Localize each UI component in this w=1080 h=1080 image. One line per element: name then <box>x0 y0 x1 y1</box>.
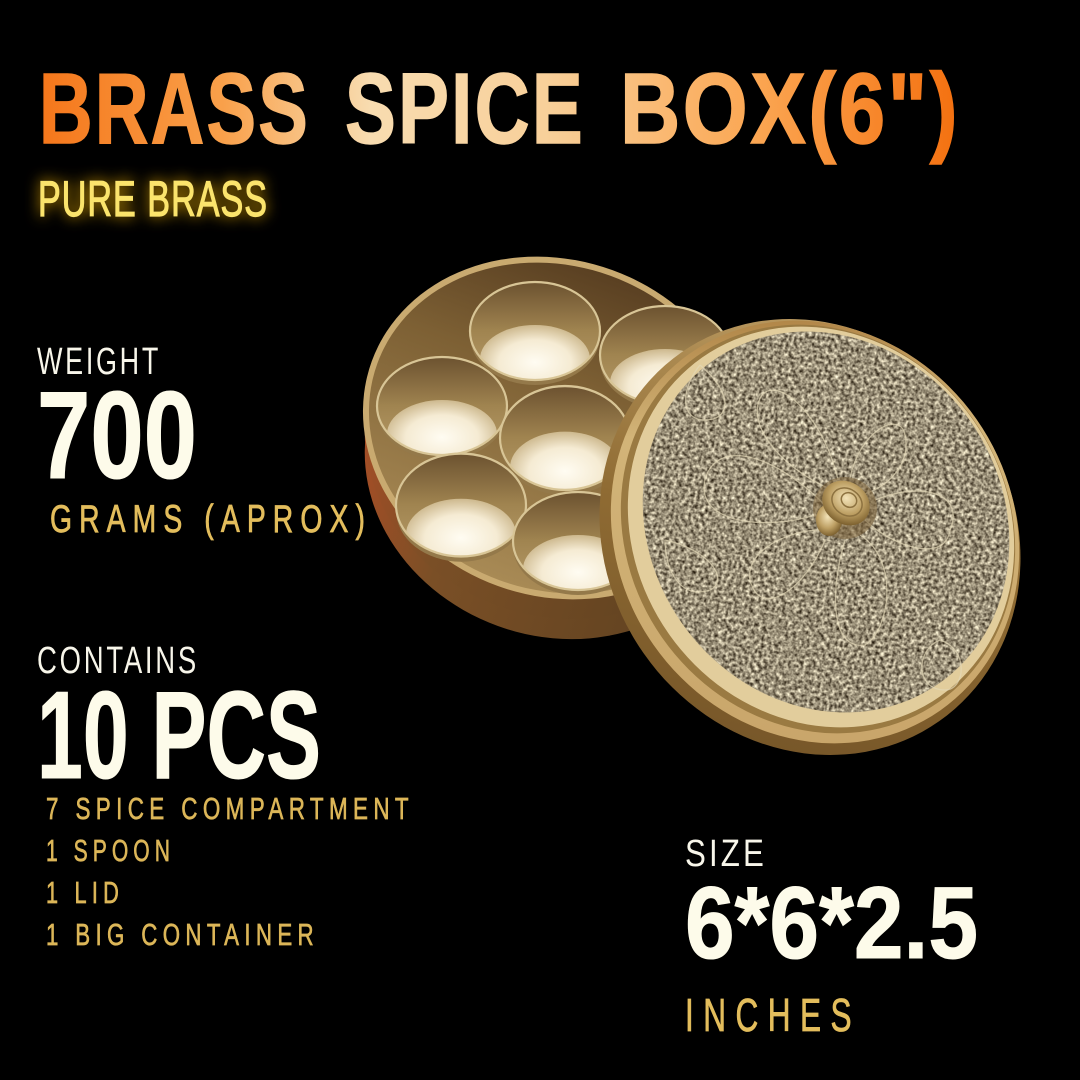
weight value: 700 <box>37 367 197 505</box>
box body <box>316 224 794 692</box>
lid knob <box>813 471 879 539</box>
lid light band <box>550 251 1080 803</box>
contents list: 7 SPICE COMPARTMENT <box>46 791 414 826</box>
product image: brass spice box <box>314 203 1080 838</box>
contents list <box>46 791 414 952</box>
weight unit: GRAMS (APROX) <box>50 498 372 541</box>
contains value: 10 PCS <box>37 667 321 805</box>
lid outer edge <box>515 236 1080 838</box>
box interior <box>322 211 788 645</box>
contains label: CONTAINS <box>37 640 199 682</box>
spice compartments <box>377 282 730 603</box>
title: SPICE <box>345 53 585 165</box>
size value: 6*6*2.5 <box>685 866 978 980</box>
lid engraved panel <box>569 260 1080 784</box>
size label: SIZE <box>685 833 767 875</box>
lid <box>515 236 1080 838</box>
contents list: 1 BIG CONTAINER <box>46 917 319 952</box>
lid mid band <box>529 240 1080 824</box>
stat: weight <box>37 341 372 541</box>
title: BOX(6") <box>620 53 960 165</box>
title: BRASS <box>39 53 310 165</box>
lid paisley lines <box>665 365 961 690</box>
weight label: WEIGHT <box>37 341 161 383</box>
size unit: INCHES <box>685 989 861 1041</box>
subtitle: pure brass: PURE BRASS <box>38 171 268 227</box>
box rim <box>314 203 796 653</box>
stat: size <box>685 833 978 1041</box>
title <box>39 53 960 165</box>
stat: contents <box>37 640 414 952</box>
contents list: 1 LID <box>46 875 124 910</box>
lid highlight ring <box>541 247 1080 811</box>
contents list: 1 SPOON <box>46 833 175 868</box>
